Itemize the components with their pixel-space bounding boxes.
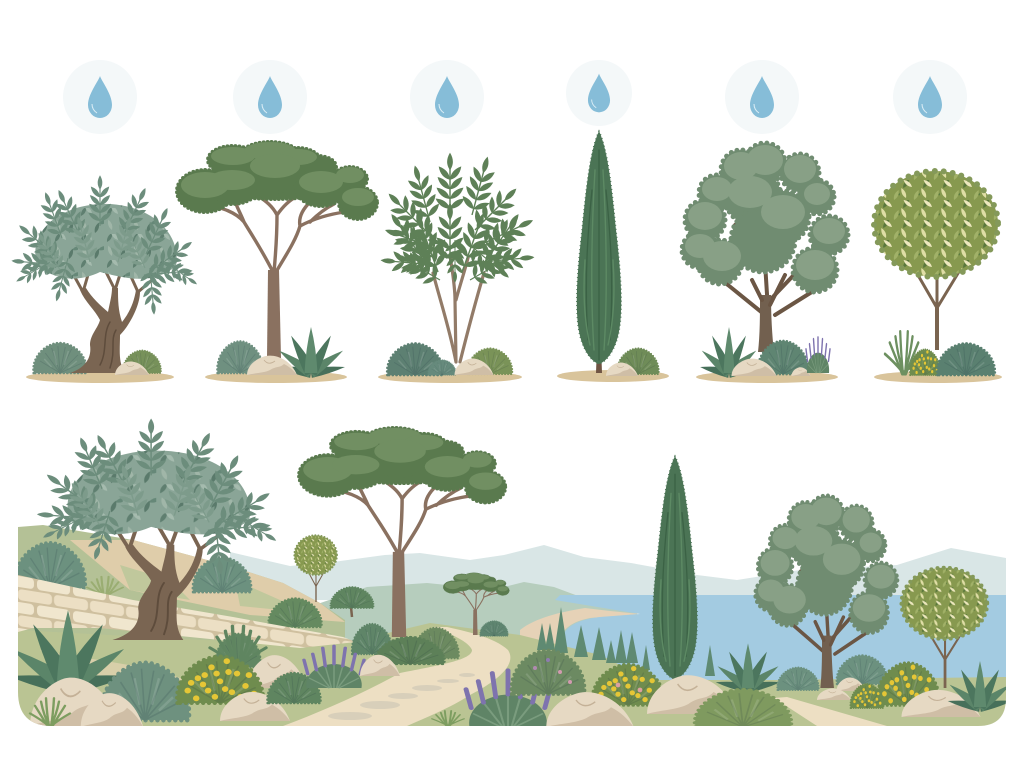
tree: ash [378,153,539,362]
right boulder [902,690,980,717]
icon: water drop above olive [63,60,137,134]
grass clump [210,626,266,667]
sand patches on ground [40,650,182,681]
right footpath [774,697,887,726]
mixed flower bush [592,664,664,705]
winding footpath [283,627,510,726]
icon: water drop above citrus [893,60,967,134]
citrus tree [902,568,987,688]
sandy slope [70,540,345,622]
tree: cypress [577,131,621,373]
panel: cypress specimen [557,131,669,382]
tree: olive [10,175,203,373]
coastal cliffs [520,608,638,644]
foreground boulder [546,692,634,727]
tree: citrus [874,171,998,350]
pink flowering shrub [511,650,585,694]
tree: oak [682,143,848,352]
shrubs around pine [352,624,459,664]
tree: stone pine [177,142,377,358]
panel: oak specimen [682,143,848,383]
tall cypress [653,456,697,688]
small blue shrub [777,668,819,690]
left hillside [18,525,345,650]
foreground left shrub [101,663,189,720]
oak tree [755,496,897,688]
blue grey shrub [837,656,887,684]
olive tree [35,419,284,640]
right agave [947,661,1013,712]
long boulder [647,675,737,714]
row of distant cypresses [537,607,715,676]
panel: ash specimen [378,153,539,383]
green patches on slope [120,565,282,610]
low shrub [268,673,320,703]
mid boulder [252,655,300,688]
ground [18,623,1006,726]
foreground agave [715,643,781,693]
panel: citrus specimen [874,171,1002,383]
low rock [220,692,290,721]
panel: olive specimen [10,175,203,383]
small citrus tree in distance [294,535,337,602]
stone terrace wall [18,575,356,648]
rocks near oak [817,677,866,700]
lavender clump [304,646,364,688]
distant pine [444,573,509,635]
water need badge row [63,60,967,134]
foreground lavender [466,670,550,727]
hillside bushes [15,543,321,627]
green mid hills [320,582,637,640]
distant mountains [230,545,1006,600]
rock by lavender [360,655,400,676]
foreground green shrub [695,690,791,727]
foreground left agave [18,610,124,689]
sea [555,595,1006,680]
low shrub behind pine [480,621,508,636]
icon: water drop above ash [410,60,484,134]
foreground left boulder [30,678,143,727]
icon: water drop above stone pine [233,60,307,134]
yellow flowering bush [177,656,263,703]
icon: water drop above cypress [566,60,632,126]
icon: water drop above oak [725,60,799,134]
small round tree [331,587,373,617]
stepping stones [328,673,475,720]
stone pine [299,428,505,637]
panel: stone pine specimen [177,142,377,383]
path side grass [432,711,464,726]
yellow bushes [850,663,939,708]
panel: Mediterranean landscape [6,419,1013,727]
grass tuft [30,698,70,727]
